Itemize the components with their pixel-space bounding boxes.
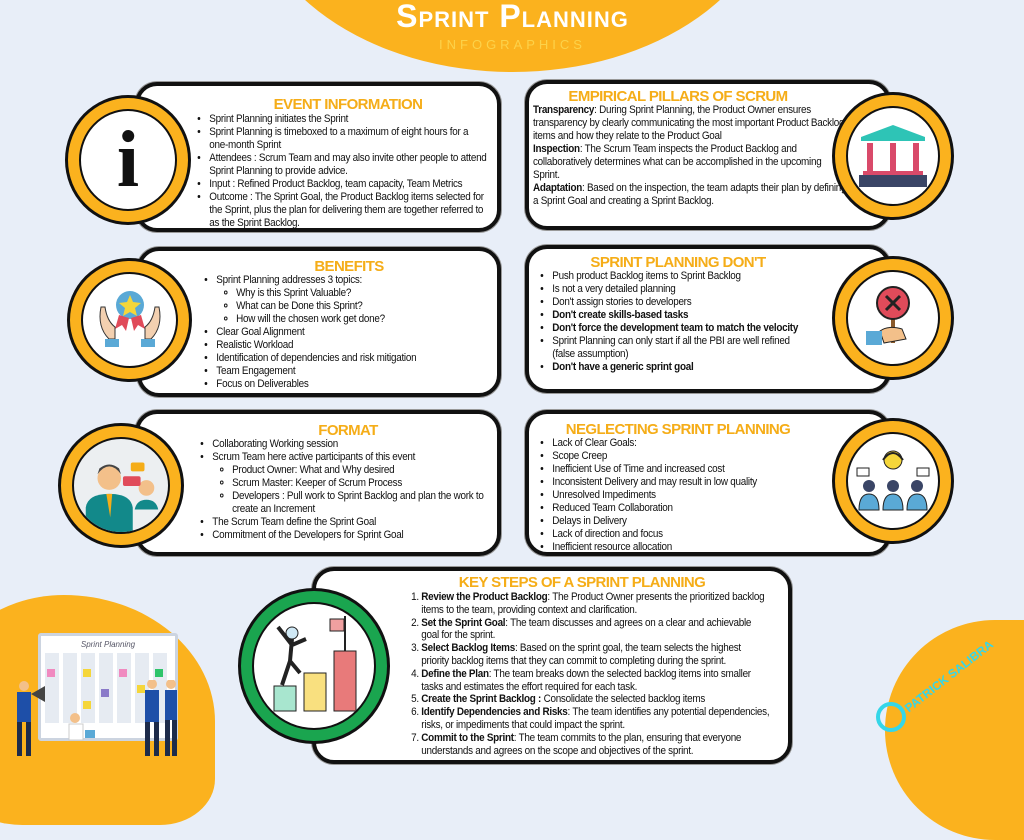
heading: NEGLECTING SPRINT PLANNING — [566, 421, 790, 438]
panel: format — [135, 410, 501, 556]
icon: info — [65, 95, 191, 225]
subtitle: INFOGRAPHICS — [439, 37, 586, 52]
text block: Clear Goal Alignment — [216, 326, 304, 338]
text block — [540, 437, 758, 553]
text block — [200, 438, 484, 541]
heading: KEY STEPS OF A SPRINT PLANNING — [459, 574, 705, 591]
heading: EMPIRICAL PILLARS OF SCRUM — [568, 88, 788, 105]
text block: Is not a very detailed planning — [552, 283, 675, 295]
text block: Don't force the development team to match the velocity — [552, 322, 798, 334]
text block: Sprint Planning addresses 3 topics: — [216, 274, 362, 286]
text block — [198, 113, 487, 229]
heading: FORMAT — [318, 422, 378, 439]
text block: Sprint Planning can only start if all the PBI are well refined (false assumption) — [552, 335, 790, 360]
text block: Reduced Team Collaboration — [552, 502, 673, 514]
text block: Collaborating Working session — [212, 438, 338, 450]
text block: Unresolved Impediments — [552, 489, 656, 501]
icon: info: i — [117, 116, 139, 204]
text block: Scrum Master: Keeper of Scrum Process — [232, 477, 402, 489]
logo: Patrick Salibra blog — [876, 637, 996, 732]
panel: benefits — [137, 247, 501, 397]
text block: What can be Done this Sprint? — [236, 300, 363, 312]
text block: Lack of Clear Goals: — [552, 437, 637, 449]
text block: Developers : Pull work to Sprint Backlog and plan the work to create an Increment — [232, 490, 484, 515]
text block: Why is this Sprint Valuable? — [236, 287, 351, 299]
text block: Commitment of the Developers for Sprint Goal — [212, 529, 403, 541]
icon: hands with medal — [67, 258, 192, 382]
text block: The Scrum Team define the Sprint Goal — [212, 516, 376, 528]
text block: Team Engagement — [216, 365, 295, 377]
text block: Adaptation: Based on the inspection, the team adapts their plan by defining a Sprint Goal and creating a Sprint Backlog. — [533, 182, 846, 207]
icon: people talking — [58, 423, 184, 548]
text block: Set the Sprint Goal: The team discusses and agrees on a clear and achievable goal for the sprint. — [421, 617, 751, 641]
text block: Commit to the Sprint: The team commits to the plan, ensuring that everyone understands and agrees on the scope and objectives of the sprint. — [421, 732, 741, 757]
illustration: sprint planning board: Sprint Planning — [81, 640, 135, 649]
illustration: people — [17, 680, 177, 756]
text block: Select Backlog Items: Based on the sprint goal, the team selects the highest priority backlog items that they can commit to completing during the sprint. — [421, 642, 741, 667]
icon: logo mark — [876, 702, 906, 732]
header banner — [250, 0, 775, 72]
text block: Lack of direction and focus — [552, 528, 663, 540]
icon: team — [832, 418, 954, 544]
text block — [533, 104, 846, 207]
text block: Create the Sprint Backlog : Consolidate the selected backlog items — [421, 693, 705, 705]
decorative blob bottom left — [0, 595, 215, 825]
text block: How will the chosen work get done? — [236, 313, 385, 325]
panel: sprint planning don't — [525, 245, 891, 393]
text block: Product Owner: What and Why desired — [232, 464, 394, 476]
text block: Push product Backlog items to Sprint Backlog — [552, 270, 741, 282]
decorative blob bottom right — [885, 620, 1024, 840]
text block: Inspection: The Scrum Team inspects the Product Backlog and collaboratively determines what can be accomplished in the upcoming Sprint. — [533, 143, 821, 181]
icon: steps with flag — [238, 588, 390, 744]
icon: stop sign — [832, 256, 954, 380]
text block: Inefficient Use of Time and increased cost — [552, 463, 725, 475]
heading: BENEFITS — [314, 258, 384, 275]
text block: Input : Refined Product Backlog, team capacity, Team Metrics — [209, 178, 462, 190]
text block: Identification of dependencies and risk mitigation — [216, 352, 416, 364]
illustration: sprint planning board — [38, 633, 178, 741]
text block: Inefficient resource allocation — [552, 541, 672, 553]
text block: Realistic Workload — [216, 339, 293, 351]
text block: Don't create skills-based tasks — [552, 309, 688, 321]
heading: SPRINT PLANNING DON'T — [590, 254, 766, 271]
text block — [540, 270, 798, 373]
panel: key steps — [312, 567, 792, 764]
logo text: PATRICK SALIBRA — [902, 637, 996, 715]
text block: Don't assign stories to developers — [552, 296, 691, 308]
text block: Sprint Planning initiates the Sprint — [209, 113, 348, 125]
text block: Don't have a generic sprint goal — [552, 361, 693, 373]
text block — [204, 274, 416, 390]
text block: Scrum Team here active participants of this event — [212, 451, 415, 463]
panel: neglecting sprint planning — [525, 410, 891, 556]
text block: Inconsistent Delivery and may result in low quality — [552, 476, 757, 488]
text block: Delays in Delivery — [552, 515, 627, 527]
heading: EVENT INFORMATION — [274, 96, 422, 113]
text block: Review the Product Backlog: The Product Owner presents the prioritized backlog items to the team, providing context and clarification. — [421, 591, 764, 616]
icon: temple — [832, 92, 954, 220]
text block: Attendees : Scrum Team and may also invite other people to attend Sprint Planning to provide advice. — [209, 152, 487, 177]
text block — [411, 591, 769, 757]
text block: Transparency: During Sprint Planning, the Product Owner ensures transparency by clearly communicating the most important Product Backlog items and how they relate to the Product Goal — [533, 104, 844, 142]
text block: Sprint Planning is timeboxed to a maximum of eight hours for a one-month Sprint — [209, 126, 468, 151]
text block: Scope Creep — [552, 450, 607, 462]
text block: Define the Plan: The team breaks down the selected backlog items into smaller tasks and estimates the effort required for each task. — [421, 668, 751, 693]
text block: Focus on Deliverables — [216, 378, 309, 390]
text block: Outcome : The Sprint Goal, the Product Backlog items selected for the Sprint, plus the plan for delivering them are together referred to as the Sprint Backlog. — [209, 191, 484, 229]
text block: Identify Dependencies and Risks: The team identifies any potential dependencies, risks, or impediments that could impact the sprint. — [421, 706, 769, 731]
panel: event information — [135, 82, 501, 232]
panel: empirical pillars — [525, 80, 891, 230]
